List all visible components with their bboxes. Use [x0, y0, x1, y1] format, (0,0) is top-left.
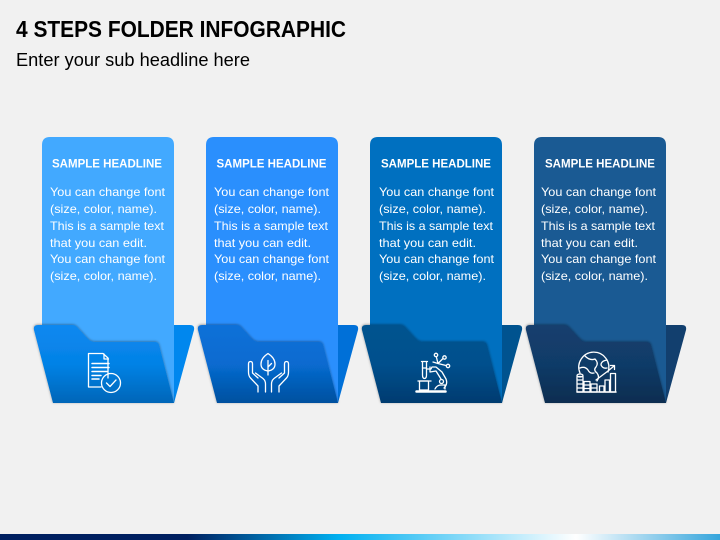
body text: You can change font — [379, 252, 495, 266]
body text — [379, 185, 495, 283]
body text: This is a sample text — [379, 219, 494, 233]
body text: that you can edit. — [50, 236, 147, 250]
panel: step 2 folder — [198, 137, 358, 403]
subtitle: Enter your sub headline here — [16, 50, 250, 70]
folder back flap — [170, 325, 194, 403]
body text: You can change font — [50, 185, 166, 199]
body text: You can change font — [541, 252, 657, 266]
body text — [214, 185, 330, 283]
folder front — [362, 325, 502, 403]
body text: (size, color, name). — [379, 269, 486, 283]
body text: You can change font — [50, 252, 166, 266]
body text: (size, color, name). — [379, 202, 486, 216]
folder back flap — [334, 325, 358, 403]
body text: (size, color, name). — [50, 269, 157, 283]
body text: You can change font — [379, 185, 495, 199]
panel: step 4 folder — [526, 137, 686, 403]
icon: globe, coins and growth chart — [577, 352, 616, 392]
folder front — [198, 325, 338, 403]
folder front — [34, 325, 174, 403]
body text: This is a sample text — [214, 219, 329, 233]
panel: step 1 folder — [34, 137, 194, 403]
body text: (size, color, name). — [541, 269, 648, 283]
body text: You can change font — [214, 185, 330, 199]
body text: that you can edit. — [379, 236, 476, 250]
card — [206, 137, 338, 403]
icon: document with check — [88, 354, 120, 392]
icon: hands holding leaf — [248, 354, 288, 392]
body text: This is a sample text — [50, 219, 165, 233]
body text: (size, color, name). — [541, 202, 648, 216]
card — [42, 137, 174, 403]
body text: You can change font — [541, 185, 657, 199]
headline: SAMPLE HEADLINE — [381, 156, 491, 170]
folder back flap — [662, 325, 686, 403]
card — [534, 137, 666, 403]
body text: You can change font — [214, 252, 330, 266]
headline: SAMPLE HEADLINE — [216, 156, 326, 170]
title: 4 STEPS FOLDER INFOGRAPHIC — [16, 16, 346, 42]
body text: (size, color, name). — [50, 202, 157, 216]
body text: This is a sample text — [541, 219, 656, 233]
headline: SAMPLE HEADLINE — [52, 156, 162, 170]
body text — [50, 185, 166, 283]
body text: (size, color, name). — [214, 269, 321, 283]
folder front — [526, 325, 666, 403]
icon: robotic microscope — [416, 353, 450, 392]
folder back flap — [498, 325, 522, 403]
headline: SAMPLE HEADLINE — [545, 156, 655, 170]
bottom gradient bar — [0, 534, 720, 540]
body text: (size, color, name). — [214, 202, 321, 216]
body text: that you can edit. — [214, 236, 311, 250]
body text: that you can edit. — [541, 236, 638, 250]
card — [370, 137, 502, 403]
body text — [541, 185, 657, 283]
panel: step 3 folder — [362, 137, 522, 403]
